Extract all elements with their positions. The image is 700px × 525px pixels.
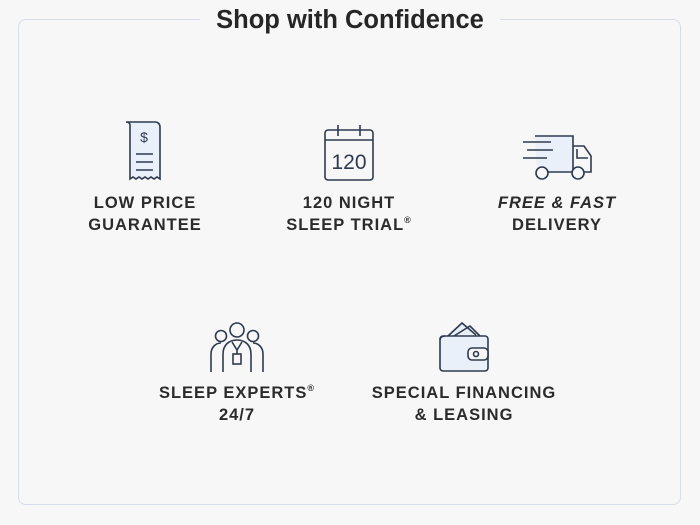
label: 24/7 (219, 406, 255, 424)
label (286, 194, 412, 234)
label: GUARANTEE (88, 216, 202, 234)
label: 120 NIGHT (303, 194, 395, 212)
item: free & fast delivery (498, 135, 616, 234)
icon: wallet (439, 322, 489, 372)
icon: receipt (126, 121, 161, 180)
label: DELIVERY (512, 216, 602, 234)
label: & LEASING (415, 406, 513, 424)
icon: receipt: $ (140, 129, 148, 145)
label: SPECIAL FINANCING (372, 384, 556, 402)
label: LOW PRICE (94, 194, 196, 212)
label: FREE & FAST (498, 194, 616, 212)
icon: calendar: 120 (331, 151, 367, 174)
title: Shop with Confidence (216, 6, 484, 34)
label: SLEEP EXPERTS® (159, 383, 315, 402)
item: 120 night sleep trial (286, 125, 412, 234)
icon: truck (523, 135, 592, 180)
label (372, 384, 556, 424)
label: SLEEP TRIAL® (286, 214, 412, 234)
label (159, 383, 315, 424)
label (88, 194, 202, 234)
item: special financing (372, 322, 556, 424)
icon: people (210, 322, 264, 372)
label (498, 194, 616, 234)
icon: calendar (324, 125, 374, 181)
item: low price guarantee (88, 121, 202, 234)
item: sleep experts (159, 322, 315, 424)
